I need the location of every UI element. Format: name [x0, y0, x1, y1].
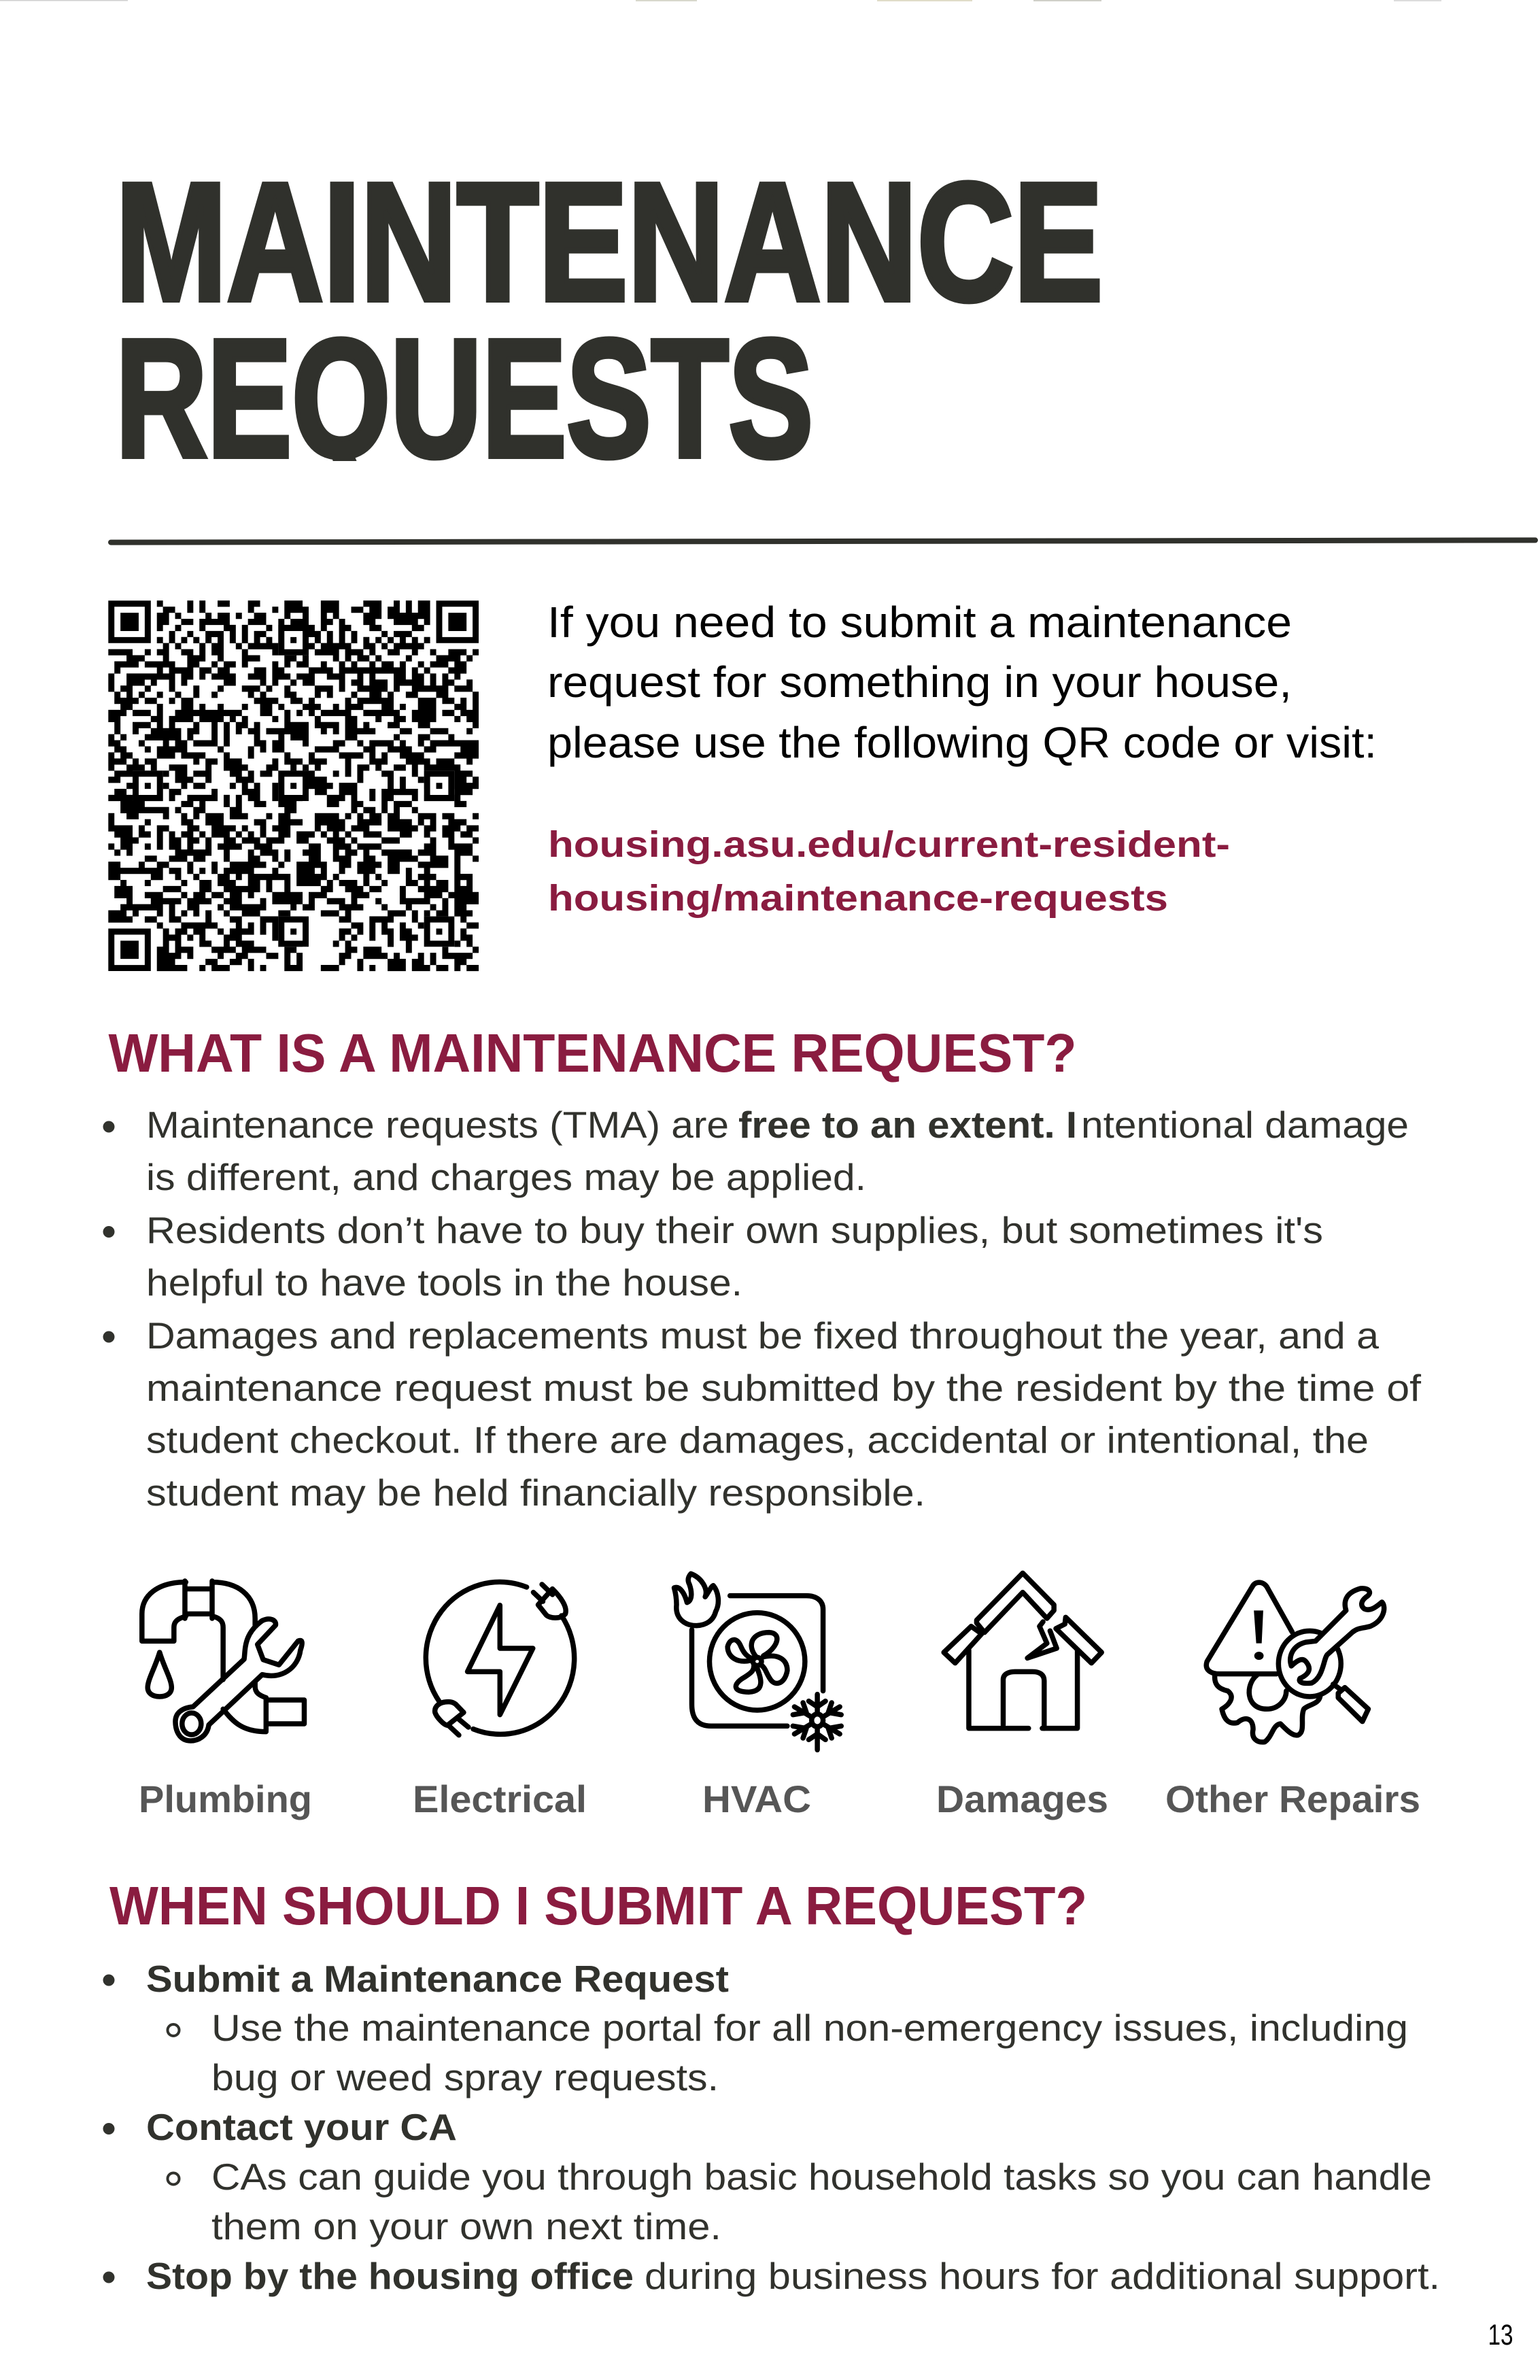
icon: hvac — [674, 1574, 841, 1750]
bullet list: what is a request: is different, and charges may be applied. — [146, 1156, 866, 1198]
intro text: please use the following QR code or visit: — [547, 718, 1377, 767]
icon: plumbing — [142, 1581, 304, 1741]
label: plumbing: Plumbing — [139, 1778, 312, 1820]
bullet list: when to submit: bug or weed spray requests. — [211, 2056, 719, 2098]
bullet list: when to submit: CAs can guide you through basic household tasks so you can handle — [211, 2156, 1432, 2198]
bullet list: what is a request: Residents don’t have to buy their own supplies, but sometimes it's — [146, 1209, 1323, 1251]
link text: housing.asu.edu/current-resident- — [548, 824, 1230, 865]
bullet list: when to submit: Submit a Maintenance Request — [146, 1958, 729, 2000]
label: other repairs: Other Repairs — [1165, 1778, 1420, 1820]
link text: housing/maintenance-requests — [548, 878, 1168, 919]
page number: 13 — [1488, 2319, 1513, 2351]
bullet list: when to submit: during business hours for additional support. — [645, 2255, 1440, 2297]
label: hvac: HVAC — [702, 1778, 811, 1820]
QR code — [108, 600, 479, 971]
bullet list: when to submit: Use the maintenance portal for all non-emergency issues, including — [211, 2007, 1408, 2049]
icon: electrical — [426, 1582, 575, 1735]
intro text: If you need to submit a maintenance — [547, 598, 1292, 647]
icon: damages — [944, 1573, 1101, 1729]
title — [122, 180, 1100, 461]
heading: what is a maintenance request: WHAT IS A MAINTENANCE REQUEST? — [109, 1023, 1077, 1083]
bullet list: what is a request: Maintenance requests (TMA) are — [146, 1104, 729, 1146]
bullet list: what is a request: Damages and replacements must be fixed throughout the year, and a — [146, 1314, 1379, 1357]
bullet list: what is a request: maintenance request must be submitted by the resident by the time of — [146, 1367, 1422, 1409]
bullet list: what is a request — [103, 1104, 1422, 1514]
intro text — [547, 598, 1377, 767]
label: damages: Damages — [936, 1778, 1108, 1820]
bullet list: when to submit: Stop by the housing office — [146, 2255, 634, 2297]
label: electrical: Electrical — [413, 1778, 587, 1820]
title: MAINTENANCE — [116, 148, 1103, 336]
bullet list: what is a request: free to an extent. I — [738, 1104, 1077, 1146]
heading: when should i submit a request: WHEN SHOULD I SUBMIT A REQUEST? — [109, 1875, 1087, 1936]
bullet list: what is a request: student checkout. If there are damages, accidental or intentional, the — [146, 1418, 1369, 1461]
bullet list: what is a request: helpful to have tools in the house. — [146, 1261, 742, 1304]
title: REQUESTS — [116, 305, 813, 492]
bullet list: when to submit — [103, 1958, 1440, 2297]
bullet list: when to submit: Contact your CA — [146, 2106, 457, 2148]
link text — [548, 824, 1230, 919]
bullet list: what is a request: student may be held financially responsible. — [146, 1472, 925, 1514]
bullet list: what is a request: ntentional damage — [1081, 1104, 1409, 1146]
icon: other repairs — [1206, 1582, 1384, 1742]
bullet list: when to submit: them on your own next time. — [211, 2205, 721, 2247]
intro text: request for something in your house, — [547, 658, 1292, 707]
